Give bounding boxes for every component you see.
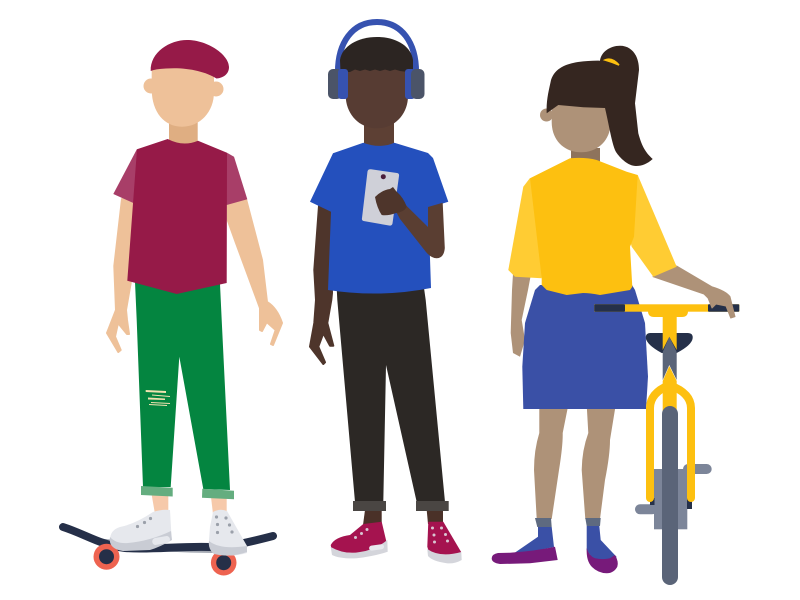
right arm and hand [375, 187, 445, 258]
figure: girl with bicycle [492, 46, 739, 585]
neck [364, 122, 394, 147]
figure: boy with headphones [310, 22, 462, 563]
bicycle [594, 304, 739, 585]
socks [510, 518, 617, 562]
right arm [653, 266, 735, 318]
legs [534, 405, 616, 519]
face [346, 70, 408, 128]
maroon t-shirt [113, 139, 247, 294]
headphone band [338, 22, 416, 75]
hair [340, 37, 413, 82]
green trousers [135, 282, 234, 499]
dark trousers [337, 288, 449, 511]
neck [571, 148, 600, 164]
left arm [310, 206, 333, 364]
neck [169, 120, 198, 146]
head [144, 68, 224, 127]
right arm [228, 199, 282, 345]
purple shoes [492, 547, 618, 573]
right shoe [427, 522, 462, 563]
ankles [152, 495, 227, 514]
blue skirt [522, 285, 648, 409]
left arm [107, 199, 133, 352]
skateboard [63, 527, 273, 576]
beanie [151, 40, 229, 78]
headphone cups [328, 69, 424, 99]
ankles [363, 510, 443, 525]
head [540, 100, 611, 152]
left shoe [331, 522, 388, 558]
right shoe [209, 510, 247, 556]
hair and ponytail [547, 46, 653, 166]
yellow top [508, 158, 677, 295]
left shoe [110, 510, 172, 551]
figure: skater boy [63, 40, 282, 576]
phone [362, 169, 399, 226]
left arm [511, 274, 531, 357]
blue t-shirt [310, 143, 448, 294]
